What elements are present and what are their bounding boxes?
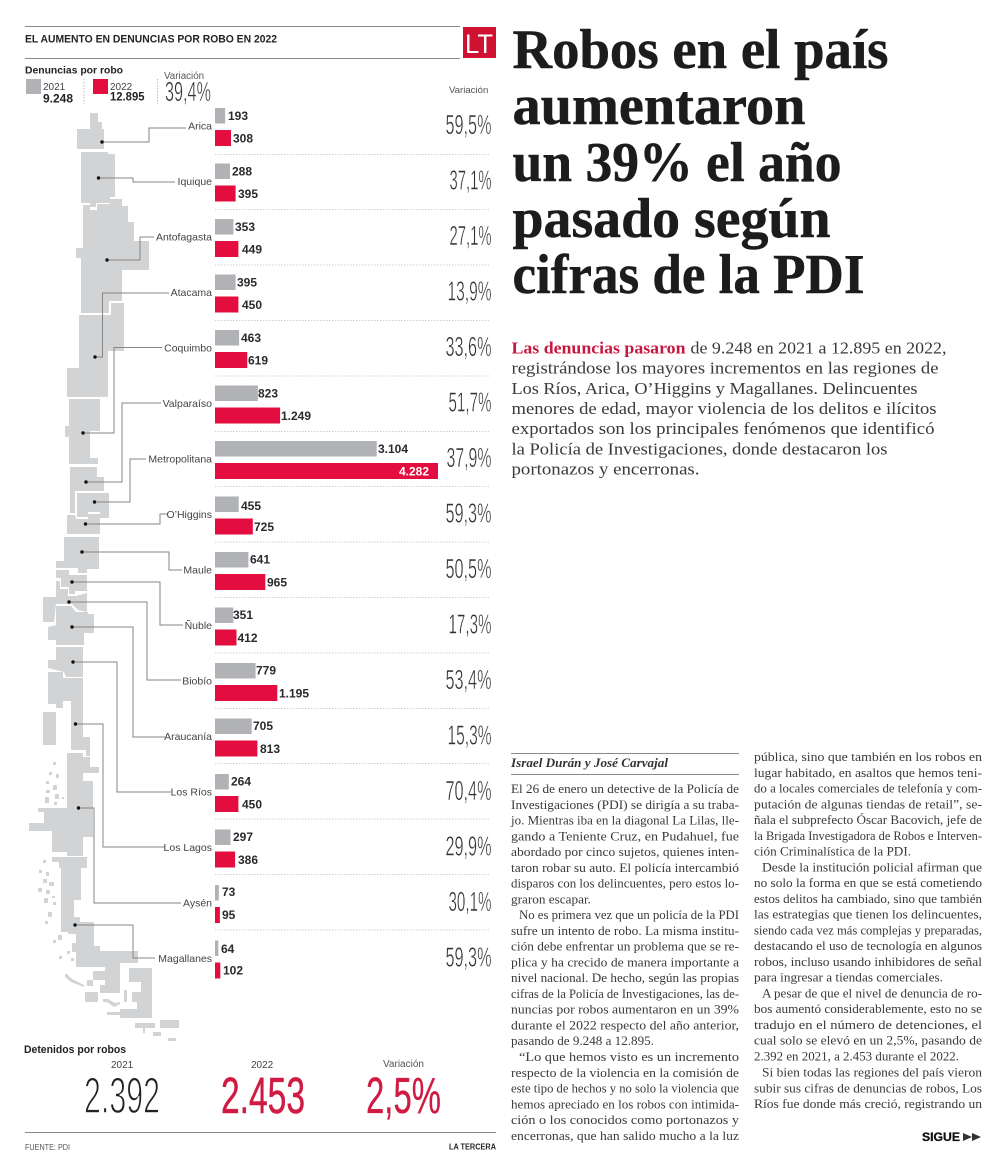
row: Metropolitana: Metropolitana: [148, 454, 212, 466]
panel: detenidos por robos: 2022: [251, 1060, 274, 1071]
panel: detenidos por robos: Variación: [383, 1059, 424, 1070]
article: column 1: “Lo que hemos visto es un incremento: [519, 1050, 739, 1064]
panel: detenidos por robos: 2021: [111, 1060, 134, 1071]
row: Los Ríos: 264: [231, 774, 251, 788]
article: column 1: [510, 782, 740, 1143]
row: Ñuble: [185, 608, 492, 646]
article: column 2: pública, sino que también en los robos en: [754, 750, 983, 764]
row: Araucanía: 705: [253, 719, 273, 733]
row: Antofagasta: Antofagasta: [156, 232, 212, 244]
article: column 2: putación de algunas tiendas de retail”, se-: [754, 797, 982, 811]
row: Arica: [188, 108, 492, 146]
article: column 1: plica y ha crecido de manera importante a: [511, 955, 739, 969]
row: Aysén: 95: [222, 908, 236, 922]
article: column 2: estos delitos ha cambiado, sino que también: [754, 892, 983, 906]
headline: aumentaron: [512, 75, 806, 137]
row: Antofagasta: 353: [235, 220, 255, 234]
legend: denuncias por robo: 9.248: [43, 94, 74, 106]
row: O'Higgins: 59,3%: [446, 498, 492, 528]
row: Biobío: [182, 663, 492, 701]
article: column 2: tradujo en el número de detenciones, el: [754, 1018, 983, 1032]
row: Arica: 308: [233, 132, 253, 146]
row: Metropolitana: 37,9%: [446, 442, 492, 473]
article: column 1: respecto de la violencia en la comisión de: [511, 1066, 739, 1080]
row: Ñuble: Ñuble: [185, 619, 212, 632]
row: Iquique: [178, 164, 492, 202]
footer: source and credit: LA TERCERA: [449, 1142, 496, 1152]
lead paragraph: exportados son los principales fenómenos que identificó: [512, 419, 934, 438]
article: column 2: ñala el subprefecto Óscar Bacovich, jefe de: [754, 813, 982, 827]
map of Chile by region: [29, 113, 179, 1041]
lead paragraph: Las denuncias pasaron: [512, 338, 686, 358]
row: Ñuble: 17,3%: [448, 608, 492, 640]
row: Metropolitana: 4.282: [399, 464, 429, 478]
icon: LT logo: LT: [465, 29, 493, 59]
article: column 2: 2.392 en 2021, a 2.453 durante el 2022.: [754, 1049, 959, 1063]
article: column 2: Desde la institución policial afirman que: [762, 860, 982, 874]
article: column 2: [754, 750, 983, 1111]
row: Maule: 50,5%: [446, 553, 492, 584]
row: Arica: Arica: [188, 121, 212, 133]
row: Los Lagos: Los Lagos: [164, 842, 212, 854]
footer: source and credit: FUENTE: PDI: [25, 1142, 70, 1152]
headline: un 39% el año: [512, 132, 842, 194]
row: Metropolitana: 3.104: [378, 442, 408, 456]
row: Atacama: 395: [237, 276, 257, 290]
article: column 1: durante el 2022 respecto del año anterior,: [511, 1018, 739, 1032]
row: Los Lagos: 297: [233, 830, 253, 844]
row: Aysén: 30,1%: [448, 886, 492, 917]
row: Magallanes: [158, 940, 492, 978]
article: column 1: ción o los conocidos como portonazos y: [511, 1113, 740, 1127]
legend: denuncias por robo: 2022: [110, 82, 133, 93]
article: column 1: sufre un intento de robo. La misma institu-: [511, 924, 739, 938]
article: column 2: para ingresar a tiendas comerciales.: [754, 970, 943, 984]
article: column 1: hemos apreciado en los robos con intimida-: [511, 1097, 739, 1111]
row: Maule: [183, 552, 492, 590]
article: column 2: Ríos fue donde más creció, registrando un: [754, 1097, 983, 1111]
headline: [512, 19, 888, 306]
row: Araucanía: Araucanía: [164, 731, 212, 743]
lead paragraph: registrándose los mayores incrementos en las regiones de: [512, 359, 938, 378]
lead paragraph: [512, 338, 946, 479]
header: infographic title: EL AUMENTO EN DENUNCIAS POR ROBO EN 2022: [25, 34, 277, 46]
row: Iquique: 37,1%: [450, 164, 492, 196]
article: column 2: no solo la forma en que se está cometiendo: [754, 876, 982, 890]
row: Magallanes: 59,3%: [446, 942, 492, 972]
row: Biobío: 779: [256, 664, 276, 678]
row: Atacama: 13,9%: [448, 276, 492, 306]
row: Valparaíso: 823: [258, 386, 278, 400]
row: Valparaíso: [163, 386, 492, 424]
row: Maule: Maule: [183, 565, 212, 577]
row: O'Higgins: O’Higgins: [166, 509, 212, 521]
row: Valparaíso: Valparaíso: [163, 398, 212, 410]
legend: denuncias por robo: 2021: [43, 82, 66, 93]
article: column 1: No es primera vez que un policía de la PDI: [519, 908, 739, 922]
row: O'Higgins: 455: [241, 499, 261, 513]
row: Coquimbo: [164, 330, 492, 368]
row: Aysén: 73: [222, 885, 236, 899]
article: column 1: nuncias por robos aumentaron en un 39%: [511, 1002, 740, 1016]
lead paragraph: la Policía de Investigaciones, donde destacaron los: [512, 439, 888, 458]
continuation marker: sigue: SIGUE: [922, 1130, 960, 1144]
article: column 2: Si bien todas las regiones del país vieron: [762, 1066, 983, 1080]
article: column 1: cifras de la Policía de Investigaciones, las de-: [511, 987, 739, 1001]
article: column 1: gando a Teniente Cruz, en Pudahuel, fue: [511, 829, 739, 843]
legend: denuncias por robo: 12.895: [110, 92, 145, 104]
row: Valparaíso: 51,7%: [448, 386, 492, 418]
row: Ñuble: 412: [238, 631, 258, 645]
headline: cifras de la PDI: [512, 244, 864, 306]
row: Coquimbo: 619: [248, 354, 268, 368]
row: Atacama: [171, 274, 492, 312]
row: Ñuble: 351: [233, 608, 253, 622]
article: column 1: pasando de 9.248 a 12.895.: [511, 1034, 654, 1048]
continuation marker: sigue: [922, 1130, 981, 1144]
article: column 1: nivel nacional. De hecho, según las propias: [511, 971, 739, 985]
row: Biobío: 1.195: [279, 686, 309, 700]
legend: denuncias por robo: [25, 64, 211, 107]
row: Antofagasta: [156, 219, 492, 257]
row: Los Ríos: 450: [242, 798, 262, 812]
article: column 1: ción debe enfrentar un problema que se re-: [511, 940, 739, 954]
row: Coquimbo: 33,6%: [446, 331, 492, 362]
article: column 2: do a locales comerciales de telefonía y com-: [754, 782, 982, 796]
row: Valparaíso: 1.249: [281, 409, 311, 423]
row: O'Higgins: 725: [254, 520, 274, 534]
article: column 1: disparos con los delincuentes, pero estos lo-: [511, 876, 739, 890]
panel: detenidos por robos: 2.453: [221, 1067, 305, 1124]
footer: source and credit: [25, 1132, 496, 1152]
row: Atacama: 450: [242, 298, 262, 312]
row: Iquique: 395: [238, 187, 258, 201]
panel: detenidos por robos: 2,5%: [366, 1067, 441, 1124]
article: column 2: destacando el uso de tecnología en algunos: [754, 939, 982, 953]
article: column 2: A pesar de que el nivel de denuncia de ro-: [762, 986, 982, 1000]
panel: detenidos por robos: [24, 1044, 441, 1124]
article: column 2: bos aumentó considerablemente, esto no se: [754, 1002, 982, 1016]
row: Los Ríos: [171, 774, 492, 812]
row: Magallanes: 64: [221, 942, 235, 956]
article: column 2: las estrategias que tienen los delincuentes,: [754, 908, 982, 922]
row: Antofagasta: 27,1%: [450, 220, 492, 251]
lead paragraph: Los Ríos, Arica, O’Higgins y Magallanes. Delincuentes: [512, 379, 918, 398]
row: O'Higgins: [166, 496, 492, 534]
article: column 1: taron robar su auto. El policía intercambió: [511, 861, 739, 875]
article: column 1: jo. Mientras iba en la diagonal La Lilas, lle-: [510, 814, 739, 828]
article: column 2: lugar habitado, en asaltos que hemos teni-: [754, 766, 982, 780]
column heading: variación: Variación: [449, 85, 488, 96]
article: column 2: subir sus cifras de denuncias de robos, Los: [754, 1081, 982, 1095]
row: Aysén: [183, 885, 492, 923]
row: Atacama: Atacama: [171, 287, 212, 299]
lead paragraph: menores de edad, mayor violencia de los delitos e ilícitos: [512, 399, 936, 418]
row: Los Ríos: 70,4%: [446, 775, 492, 806]
leader lines from regions to labels: [67, 128, 186, 958]
row: Iquique: Iquique: [178, 176, 212, 188]
article: column 2: robos, incluso usando inhibidores de señal: [754, 955, 983, 969]
article: column 2: ción Criminalística de la PDI.: [754, 844, 911, 858]
article: column 1: El 26 de enero un detective de la Policía de: [511, 782, 739, 796]
panel: detenidos por robos: 2.392: [84, 1067, 160, 1124]
row: Araucanía: [164, 718, 492, 756]
lead paragraph: de 9.248 en 2021 a 12.895 en 2022,: [690, 338, 946, 358]
article: column 1: encerronas, que han salido mucho a la luz: [511, 1129, 739, 1143]
article: column 2: cual solo se elevó en un 2,5%, pasando de: [754, 1034, 982, 1048]
row: Maule: 965: [267, 576, 287, 590]
row: Araucanía: 813: [260, 742, 280, 756]
article: column 1: Investigaciones (PDI) se dirigía a su traba-: [511, 798, 739, 812]
row: Biobío: Biobío: [182, 676, 212, 688]
legend: denuncias por robo: Variación: [164, 71, 204, 82]
row: Araucanía: 15,3%: [448, 720, 492, 750]
row: Coquimbo: 463: [241, 331, 261, 345]
row: Aysén: Aysén: [183, 898, 212, 910]
article: column 1: este tipo de hechos y no solo la violencia que: [511, 1082, 739, 1096]
row: Coquimbo: Coquimbo: [164, 343, 212, 355]
row: Antofagasta: 449: [242, 242, 262, 256]
row: Arica: 193: [228, 109, 248, 123]
row: Biobío: 53,4%: [446, 664, 492, 695]
article: column 2: la Brigada Investigadora de Robos e Interven-: [754, 829, 982, 843]
row: Los Lagos: [164, 830, 492, 868]
row: Los Lagos: 29,9%: [446, 830, 492, 862]
article: column 1: abordado por cinco sujetos, quienes inten-: [511, 845, 739, 859]
row: Metropolitana: [148, 441, 492, 479]
byline: Israel Durán y José Carvajal: [510, 756, 669, 770]
lead paragraph: portonazos y encerronas.: [512, 460, 700, 479]
article: column 1: graron escapar.: [511, 892, 591, 906]
panel: detenidos por robos: Detenidos por robos: [24, 1044, 126, 1056]
row: Magallanes: 102: [223, 964, 243, 978]
legend: denuncias por robo: Denuncias por robo: [25, 64, 123, 76]
row: Magallanes: Magallanes: [158, 953, 212, 965]
row: Maule: 641: [250, 552, 270, 566]
row: Iquique: 288: [232, 164, 252, 178]
row: Los Ríos: Los Ríos: [171, 787, 212, 799]
headline: Robos en el país: [512, 19, 888, 81]
row: Los Lagos: 386: [238, 853, 258, 867]
legend: denuncias por robo: 39,4%: [165, 76, 211, 107]
row: Arica: 59,5%: [446, 109, 492, 140]
headline: pasado según: [512, 188, 830, 250]
article: column 2: siendo cada vez más complejas y preparadas,: [754, 923, 982, 937]
